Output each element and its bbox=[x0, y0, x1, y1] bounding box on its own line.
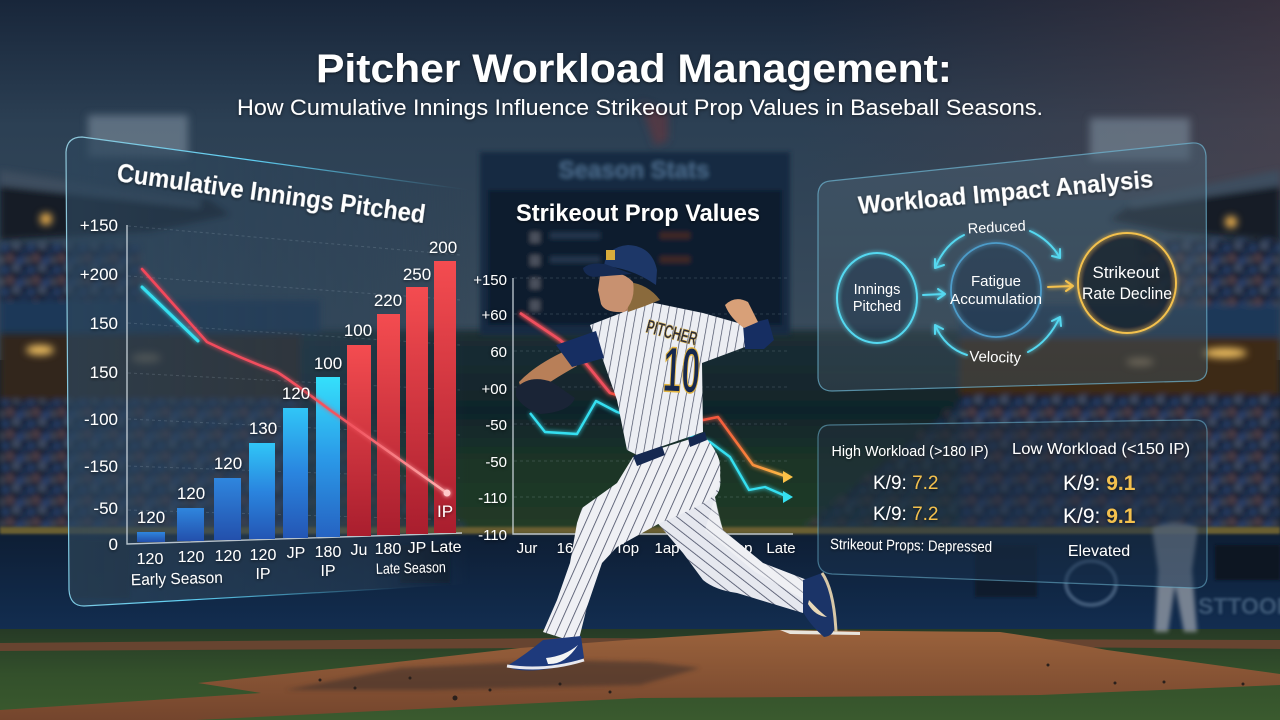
bar value labels: 120 bbox=[282, 384, 310, 403]
y axis labels bbox=[80, 216, 118, 554]
jersey name: PITCHER bbox=[644, 317, 700, 350]
rear leg shading bbox=[705, 497, 807, 600]
y axis labels: -50 bbox=[93, 499, 118, 518]
circle: strikeout rate decline bbox=[1078, 233, 1176, 333]
bar value labels: IP bbox=[437, 502, 453, 521]
x axis labels: Late bbox=[766, 540, 796, 557]
x axis labels: Lap bbox=[727, 540, 753, 557]
circle: strikeout rate decline: Strikeout bbox=[1092, 264, 1160, 282]
panel glass bbox=[66, 137, 470, 606]
y axis labels: 150 bbox=[90, 363, 118, 382]
gridlines bbox=[514, 278, 790, 497]
y axis labels: +150 bbox=[80, 216, 118, 235]
bar value labels: 120 bbox=[137, 508, 165, 527]
blurred stadium lights bbox=[26, 102, 1247, 366]
outfield wall bbox=[0, 533, 1280, 629]
panel: workload impact analysis bbox=[818, 143, 1207, 391]
red arrowhead bbox=[783, 471, 793, 483]
y axis labels: -110 bbox=[478, 527, 507, 544]
cyan trend line bbox=[530, 401, 788, 497]
x axis labels: 120 bbox=[178, 549, 204, 566]
red trend line bbox=[520, 313, 788, 477]
high workload column: Strikeout Props: Depressed bbox=[830, 536, 992, 556]
x axis labels: 180 bbox=[315, 544, 341, 561]
low workload column: K/9: 9.1 bbox=[1063, 472, 1136, 495]
bar value labels bbox=[137, 238, 457, 527]
throwing arm bbox=[725, 299, 774, 349]
bar value labels: 100 bbox=[344, 321, 372, 340]
title bbox=[237, 47, 1043, 120]
x axis labels: Top bbox=[615, 540, 639, 557]
y axis labels: -50 bbox=[485, 454, 507, 471]
heading: Cumulative Innings Pitched bbox=[115, 157, 427, 229]
bar value labels: 130 bbox=[249, 419, 277, 438]
low workload column: Low Workload (<150 IP) bbox=[1012, 441, 1190, 458]
belt bbox=[633, 432, 707, 466]
panel: strikeout prop values bbox=[473, 200, 796, 557]
y axis labels: 150 bbox=[90, 314, 118, 333]
x axis labels: Jur bbox=[517, 540, 537, 557]
axes bbox=[127, 225, 462, 544]
gridlines bbox=[128, 226, 460, 520]
low workload column: Elevated bbox=[1068, 543, 1130, 560]
stands and outfield bbox=[0, 170, 1280, 535]
bars bbox=[137, 261, 456, 542]
cyan arrowhead bbox=[783, 491, 793, 503]
dirt specks bbox=[318, 664, 1244, 700]
y axis labels: -150 bbox=[84, 457, 118, 476]
x axis labels: 16 bbox=[557, 540, 573, 557]
dark dirt patch bbox=[285, 660, 700, 690]
low workload column bbox=[1012, 441, 1190, 560]
circle: strikeout rate decline: Rate Decline bbox=[1082, 285, 1172, 303]
front leg bbox=[543, 435, 720, 643]
arrow labels: Reduced bbox=[967, 218, 1026, 238]
x axis labels: JP bbox=[408, 540, 426, 557]
circle: fatigue accumulation: Accumulation bbox=[950, 291, 1042, 308]
y axis labels: +60 bbox=[482, 307, 507, 324]
y axis labels: 60 bbox=[490, 344, 507, 361]
x axis labels: 120 bbox=[137, 551, 163, 568]
low workload column: K/9: 9.1 bbox=[1063, 505, 1136, 528]
y axis labels: 0 bbox=[109, 535, 118, 554]
circle: fatigue accumulation bbox=[950, 243, 1042, 337]
heading: Workload Impact Analysis bbox=[857, 165, 1154, 220]
outfielder bbox=[1152, 502, 1198, 632]
high workload column bbox=[830, 443, 992, 556]
y axis labels: -100 bbox=[84, 410, 118, 429]
panel: workload comparison bbox=[818, 420, 1207, 588]
circle: innings pitched bbox=[837, 253, 917, 343]
y axis labels: +00 bbox=[482, 381, 507, 398]
torso jersey bbox=[590, 302, 745, 455]
bar value labels: 250 bbox=[403, 265, 431, 284]
panel glass bbox=[818, 420, 1207, 588]
circle: innings pitched: Pitched bbox=[853, 299, 901, 315]
main heading: Pitcher Workload Management: bbox=[316, 47, 952, 91]
x axis labels: JP bbox=[287, 545, 305, 562]
bar value labels: 120 bbox=[214, 454, 242, 473]
panel: workload impact analysis: Velocity bbox=[969, 348, 1022, 367]
x axis labels: IP bbox=[255, 566, 271, 583]
x axis labels bbox=[131, 539, 462, 589]
x axis labels: 180 bbox=[375, 541, 401, 558]
scoreboard: Season Stats bbox=[559, 157, 709, 184]
bar value labels: 200 bbox=[429, 238, 457, 257]
y axis labels bbox=[473, 272, 507, 544]
high workload column: High Workload (>180 IP) bbox=[832, 443, 988, 460]
y axis labels: +200 bbox=[80, 265, 118, 284]
bar value labels: 100 bbox=[314, 354, 342, 373]
x axis labels bbox=[517, 540, 796, 557]
scoreboard bbox=[480, 152, 790, 335]
heading: Strikeout Prop Values bbox=[516, 200, 760, 227]
bar value labels: 120 bbox=[177, 484, 205, 503]
rear leg bbox=[655, 447, 807, 613]
x axis labels: 120 bbox=[215, 548, 241, 565]
neck bbox=[618, 300, 652, 320]
subheading: How Cumulative Innings Influence Strikeout Prop Values in Baseball Seasons. bbox=[237, 95, 1043, 120]
panel glass bbox=[818, 143, 1207, 391]
gloved arm bbox=[516, 331, 604, 414]
x axis labels: IP bbox=[320, 563, 336, 580]
x axis labels: Late bbox=[430, 539, 462, 556]
x axis labels: Ju bbox=[351, 542, 367, 559]
x axis labels: 1ap bbox=[654, 540, 680, 557]
y axis labels: -50 bbox=[485, 417, 507, 434]
pitcher bbox=[507, 245, 836, 670]
rear shoe bbox=[803, 573, 836, 637]
circle: innings pitched: Innings bbox=[854, 282, 900, 298]
high workload column: K/9: 7.2 bbox=[873, 473, 938, 494]
y axis labels: -110 bbox=[478, 490, 507, 507]
front shoe bbox=[507, 636, 584, 670]
field bbox=[0, 629, 1280, 720]
x axis labels: 120 bbox=[250, 547, 276, 564]
x axis labels: Late Season bbox=[376, 559, 446, 578]
circle: fatigue accumulation: Fatigue bbox=[971, 273, 1021, 290]
bar value labels: 220 bbox=[374, 291, 402, 310]
x axis labels: Early Season bbox=[131, 570, 223, 589]
sky bbox=[0, 0, 1280, 360]
high workload column: K/9: 7.2 bbox=[873, 504, 938, 525]
axes bbox=[513, 278, 793, 534]
panel: cumulative innings pitched bbox=[66, 137, 470, 606]
arrows bbox=[923, 231, 1073, 355]
jersey number: 10 bbox=[661, 333, 702, 407]
trend lines bbox=[142, 269, 450, 496]
y axis labels: +150 bbox=[473, 272, 507, 289]
head bbox=[583, 245, 660, 312]
